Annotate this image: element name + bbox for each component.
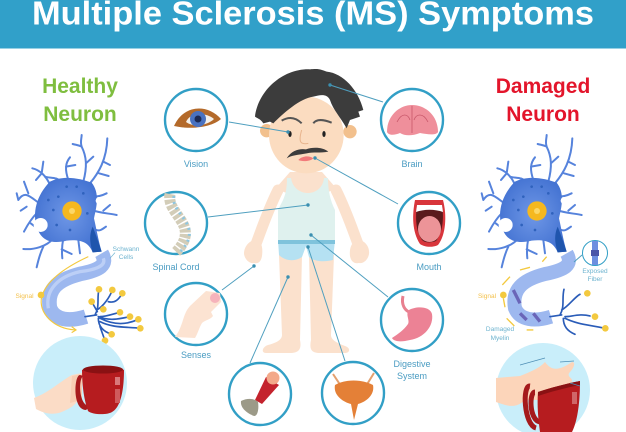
heading: damaged neuron <box>496 75 590 126</box>
label: vision: Vision <box>184 159 208 169</box>
label: brain: Brain <box>401 159 423 169</box>
label: spinal cord: Spinal Cord <box>152 262 200 272</box>
pointer lines <box>208 83 398 363</box>
label: Damaged Myelin: Damaged <box>486 326 514 333</box>
heading: healthy neuron: Neuron <box>43 103 117 126</box>
inset: exposed fiber <box>574 240 608 266</box>
healthy neuron diagram <box>17 135 144 344</box>
label: digestive system <box>393 359 431 381</box>
damaged neuron diagram <box>482 135 609 334</box>
label: Damaged Myelin: Myelin <box>491 335 510 342</box>
label: Schwann Cells <box>113 246 140 261</box>
man figure <box>244 69 369 353</box>
label: senses: Senses <box>181 350 212 360</box>
label: digestive system: System <box>397 371 427 381</box>
circle: senses <box>165 283 227 345</box>
label: Schwann Cells: Cells <box>119 254 134 261</box>
circle: mouth <box>398 192 460 254</box>
label: mouth: Mouth <box>416 262 442 272</box>
label: Signal: Signal <box>15 293 34 300</box>
heading: healthy neuron: Healthy <box>42 75 118 98</box>
circle: muscle <box>229 363 291 425</box>
title banner <box>0 0 626 48</box>
hand holding cup <box>33 336 127 430</box>
circle: bladder <box>322 362 384 424</box>
heading: healthy neuron <box>42 75 118 126</box>
circle: digestive system <box>381 289 443 351</box>
label: Exposed Fiber: Exposed <box>582 268 608 275</box>
circle: vision <box>165 89 227 151</box>
label: Exposed Fiber: Fiber <box>588 276 603 283</box>
label: Damaged Myelin <box>486 326 514 342</box>
label: Exposed Fiber <box>582 268 608 283</box>
circle: brain <box>381 89 443 151</box>
heading: damaged neuron: Damaged <box>496 75 590 98</box>
circle: spinal cord <box>145 192 207 254</box>
label: Schwann Cells: Schwann <box>113 246 140 253</box>
heading: damaged neuron: Neuron <box>506 103 580 126</box>
hand shaking with cup <box>496 343 590 432</box>
label: digestive system: Digestive <box>393 359 431 369</box>
label: Signal damaged: Signal <box>478 293 497 300</box>
